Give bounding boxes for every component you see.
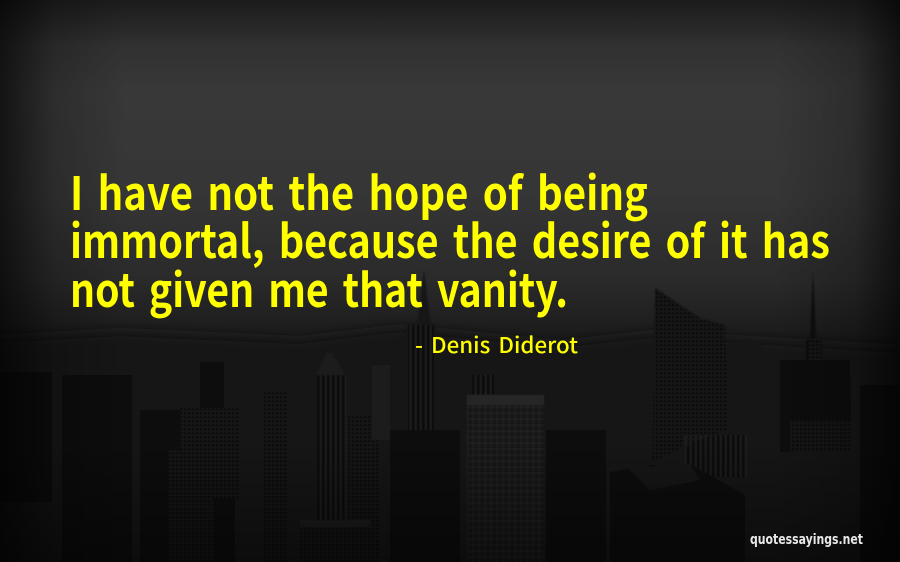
city skyline	[0, 270, 900, 562]
left mid buildings	[62, 362, 288, 562]
right spire tower	[780, 272, 852, 452]
right lower buildings	[790, 420, 860, 562]
angled skyscraper	[652, 288, 762, 477]
author attribution: - Denis Diderot	[415, 328, 578, 360]
central art-deco tower	[300, 353, 390, 562]
quote line 1: I have not the hope of being	[70, 158, 648, 224]
quote line 3: not given me that vanity.	[70, 255, 568, 321]
watermark: quotessayings.net	[750, 532, 863, 548]
distant city haze	[0, 328, 900, 562]
tower behind the author line	[406, 270, 436, 430]
quote text	[70, 158, 830, 321]
grid-windowed office building	[467, 375, 544, 562]
lower centre buildings	[390, 430, 460, 562]
dark rooftop foreground	[610, 464, 745, 562]
left dark building	[0, 372, 52, 502]
